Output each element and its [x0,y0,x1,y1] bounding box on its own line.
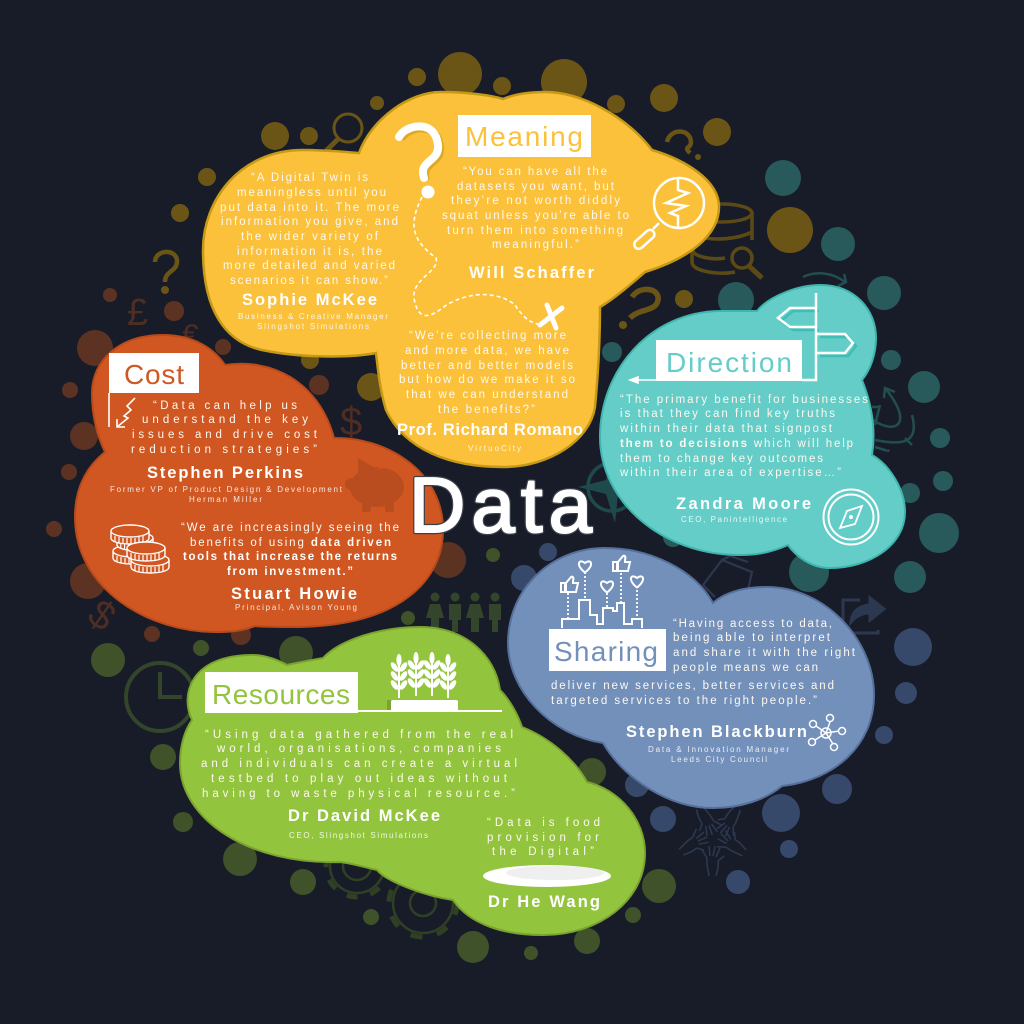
quote: Sophie McKee: Slingshot Simulations [257,322,369,331]
heading: Cost [109,353,199,393]
icon: dim currency symbols: € [182,319,199,352]
icon: dim clock [126,663,194,731]
icon: dim compass rose [578,452,648,523]
icon: dim currency symbols: $ [80,591,123,640]
quote: Zandra Moore: “The primary benefit for businesses [620,394,868,406]
quote: Stephen Perkins: reduction strategies” [131,444,317,456]
quote: Dr He Wang: the Digital” [492,846,594,858]
icon: dim question marks [155,132,701,329]
cloud shape [75,335,443,632]
heading: Direction: Direction [666,347,792,378]
quote: Prof. Richard Romano: VirtuoCity [468,444,521,453]
quote: Dr He Wang: provision for [487,832,599,844]
icon: plate [483,865,611,887]
quote: Dr David McKee: world, organisations, companies [216,743,501,755]
heading: Resources [205,672,358,713]
icon: signpost [778,293,856,380]
quote: Stephen Blackburn: deliver new services, better services and [551,680,834,692]
heading: Sharing: Sharing [554,636,658,667]
quote: Zandra Moore: within their area of expertise…” [619,467,841,479]
quote: Sophie McKee: more detailed and varied [223,260,395,272]
quote: Prof. Richard Romano: better and better models [401,360,573,372]
quote: Stuart Howie: Principal, Avison Young [235,603,357,612]
icon: dim currency symbols: $ [340,400,362,444]
quote: Dr David McKee: “Using data gathered from the real [205,729,513,741]
panel: Resources [180,627,645,935]
quote: Will Schaffer: “You can have all the [463,166,607,178]
icon: city with likes and hearts [561,556,643,628]
quote: Zandra Moore [619,394,868,524]
quote: Sophie McKee: information it is, the [237,246,382,258]
icon: dim hands circle [675,803,751,876]
quote: Stephen Perkins: Herman Miller [189,495,262,504]
icon: magnifier with chart [632,178,704,251]
quote: Prof. Richard Romano: that we can understand [406,389,568,401]
icon: X mark [540,305,562,328]
quote: Dr David McKee [201,729,517,840]
quote: Prof. Richard Romano: but how do we make it so [399,374,575,386]
quote: Stephen Blackburn: Leeds City Council [671,755,767,764]
quote: Stephen Perkins: Former VP of Product Design & Development [110,485,343,494]
icon: dim currency symbols [80,292,362,640]
heading: Meaning: Meaning [465,121,583,152]
quote: Stuart Howie: tools that increase the returns [183,551,397,563]
quote: Dr David McKee: CEO, Slingshot Simulations [289,831,428,840]
icon: coins [111,525,169,573]
icon: piggy bank [345,458,404,512]
quote: Stuart Howie: Stuart Howie [231,585,357,603]
quote: Will Schaffer: meaningful.” [492,239,579,251]
quote: Stephen Perkins: “Data can help us [153,400,297,412]
quote: Sophie McKee: information you give, and [221,216,398,228]
quote: Stephen Blackburn: Data & Innovation Manager [648,745,789,754]
quote: Stephen Perkins: issues and drive cost [132,429,318,441]
icon: dim currency symbols: £ [127,292,148,334]
quote: Sophie McKee: meaningless until you [237,187,386,199]
background circles: blue [511,543,932,894]
quote: Sophie McKee: Sophie McKee [242,291,377,309]
quote: Stephen Blackburn: people means we can [673,662,818,674]
icon: dim share [843,598,884,633]
cloud shape [600,285,905,568]
quote: Sophie McKee: put data into it. The more [220,202,399,214]
quote: Stephen Blackburn: and share it with the right [673,647,856,659]
heading: Meaning [458,115,591,157]
quote: Sophie McKee: the wider variety of [241,231,379,243]
quote: Sophie McKee: scenarios it can show.” [230,275,388,287]
icon: dim people [426,592,501,632]
quote: Dr David McKee: testbed to play out ideas without [211,773,508,785]
title: Data: Data [409,461,593,549]
background circles: brown [46,288,466,645]
panel: Meaning [203,92,719,467]
quote: Dr David McKee: having to waste physical resource.” [202,788,515,800]
quote: Zandra Moore: CEO, Panintelligence [681,515,788,524]
cloud shape [508,548,874,808]
quote: Zandra Moore: them to change key outcomes [620,453,823,465]
quote: Will Schaffer: squat unless you’re able to [442,210,629,222]
background circles: teal [602,160,959,593]
quote: Stuart Howie: “We are increasingly seeing the [181,522,399,534]
quote: Zandra Moore: is that they can find key truths [620,408,835,420]
quote: Stephen Blackburn: Stephen Blackburn [626,723,807,741]
quote: Dr He Wang [483,817,611,911]
quote: Stephen Blackburn: targeted services to the right people.” [551,695,817,707]
title: Data: Data [409,461,593,549]
quote: Prof. Richard Romano: Prof. Richard Romano [397,421,583,439]
quote: Sophie McKee: “A Digital Twin is [251,172,368,184]
icon: compass [824,490,878,544]
quote: Will Schaffer: they’re not worth diddly [451,195,620,207]
panel: Direction [600,285,905,568]
icon: wheat [358,652,502,712]
quote: Will Schaffer [442,166,629,282]
quote: Dr David McKee: Dr David McKee [288,807,440,825]
heading: Direction [656,340,802,381]
quote: Prof. Richard Romano: the benefits?” [438,404,535,416]
background circles: green [91,548,676,963]
icon: dim magnifier [326,114,362,151]
quote: Sophie McKee [220,172,399,331]
quote: Stuart Howie: from investment.” [227,566,353,578]
quote: Zandra Moore: within their data that signpost [619,423,833,435]
panel: Sharing [508,548,874,808]
quote: Dr David McKee: and individuals can create a virtual [201,758,517,770]
quote: Zandra Moore: Zandra Moore [676,495,811,513]
icon: question mark [399,126,440,198]
quote: Prof. Richard Romano: “We’re collecting more [409,330,566,342]
quote: Will Schaffer: Will Schaffer [469,264,595,282]
quote: Stephen Blackburn: being able to interpret [673,632,831,644]
icon: left arrow line [630,377,656,383]
heading: Cost: Cost [124,359,184,390]
quote: Will Schaffer: datasets you want, but [457,181,615,193]
quote: Sophie McKee: Business & Creative Manager [238,312,388,321]
icon: network [808,714,846,750]
quote: Stephen Perkins: Stephen Perkins [147,464,303,482]
quote: Stuart Howie: benefits of using data driven [190,537,391,549]
quote: Stephen Blackburn: “Having access to data, [673,618,832,630]
quote: Will Schaffer: turn them into something [447,225,623,237]
quote: Dr He Wang: “Data is food [487,817,600,829]
quote: Prof. Richard Romano: and more data, we have [405,345,569,357]
heading: Resources: Resources [212,679,350,710]
quote: Prof. Richard Romano [397,330,583,453]
heading: Sharing [549,629,666,671]
cloud shape [180,627,645,935]
icon: dim arrows [803,273,914,451]
icon: falling arrow [109,393,135,427]
cloud shape [203,92,719,467]
icon: dim handshake [703,556,752,600]
quote: Stephen Perkins: understand the key [142,414,308,426]
background circles: amber [171,52,813,401]
icon: dim database [692,204,762,278]
icon: dim gears [326,835,457,937]
quote: Zandra Moore: them to decisions which will help [620,438,853,450]
quote: Stuart Howie [181,522,399,612]
quote: Stephen Perkins [110,400,343,504]
quote: Stephen Blackburn [551,618,856,764]
quote: Dr He Wang: Dr He Wang [488,893,600,911]
icon: dashed trail [414,197,541,325]
panel: Cost [75,335,443,632]
